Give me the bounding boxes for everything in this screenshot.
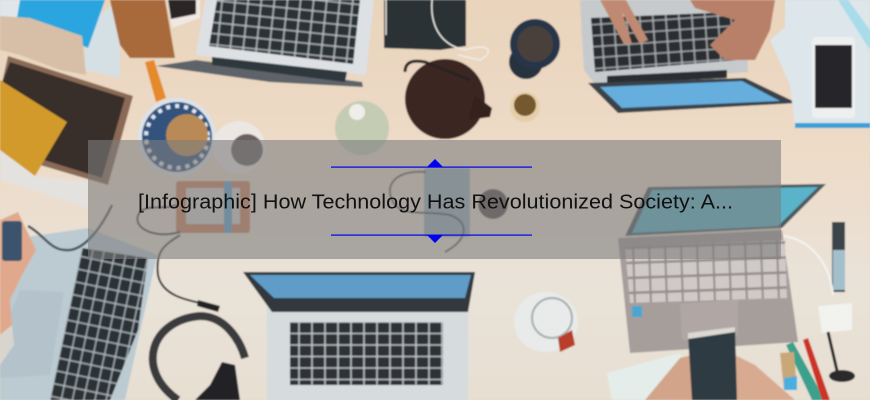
printed chart paper (607, 353, 692, 400)
left silver laptop (0, 228, 157, 400)
orange tag (145, 60, 166, 102)
headphones (153, 316, 245, 400)
marker and adapter (784, 222, 855, 382)
beige pouch (0, 16, 86, 75)
orange hard drive (176, 181, 250, 233)
black notebook, top centre (384, 0, 466, 50)
centre silver laptop (243, 272, 475, 400)
cast iron teapot (405, 59, 492, 139)
hands holding smartphone (645, 327, 795, 400)
bowl of nuts (138, 98, 216, 176)
USB plug (197, 300, 220, 312)
right laptop, taupe keyboard (618, 184, 826, 353)
translucent title banner (88, 140, 781, 259)
dark notebook with yellow pouch (0, 56, 133, 208)
hand holding phone (0, 205, 112, 365)
grey power bank with cable (390, 168, 470, 252)
coffee dripper (509, 19, 560, 79)
cables around hard drive (137, 205, 205, 304)
small phone, top (167, 0, 200, 28)
pens and eraser (780, 338, 830, 400)
white cup (213, 121, 265, 173)
white earphone cable (386, 0, 488, 60)
glass water bottle (514, 292, 578, 352)
brown leather pouch (110, 0, 175, 58)
paper sheets and white phone (770, 0, 870, 128)
title text: [Infographic] How Technology Has Revolutionized Society: A... (138, 192, 733, 214)
grey round disc (478, 189, 508, 219)
right laptop with hands (580, 0, 797, 113)
bottom ornament line with diamond tip (331, 234, 532, 243)
top laptop (156, 0, 374, 87)
blue folder and papers, top left (0, 0, 120, 78)
glass bottle (335, 101, 389, 155)
small cup (510, 92, 540, 122)
top ornament line with diamond tip (331, 159, 532, 168)
